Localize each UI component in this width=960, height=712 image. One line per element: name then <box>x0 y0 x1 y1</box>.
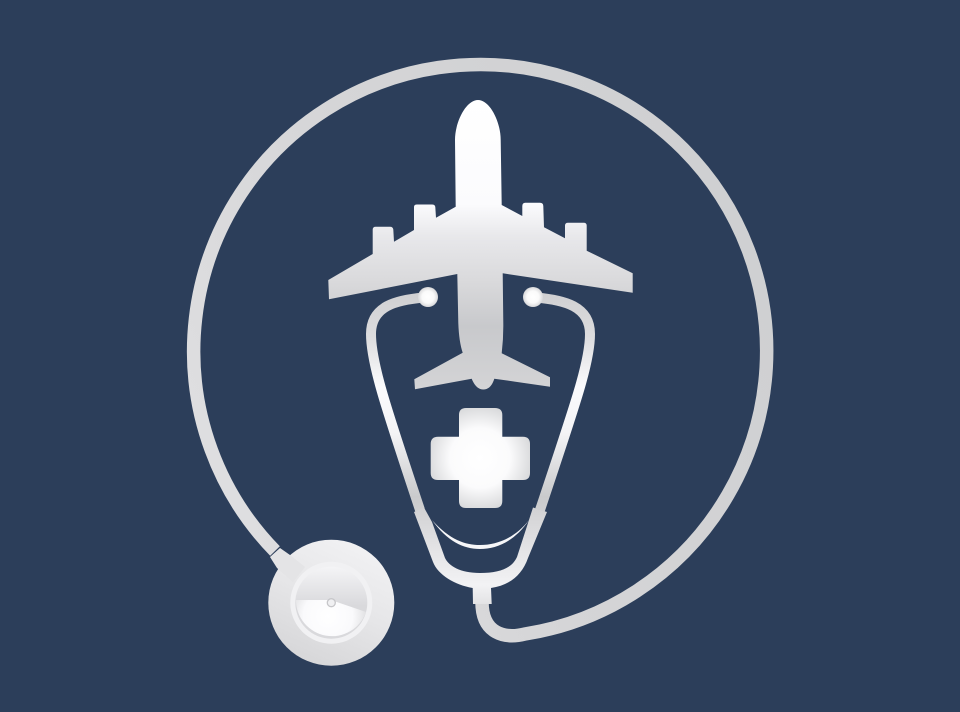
centre screw <box>327 599 335 607</box>
outer disc <box>268 540 394 666</box>
stethoscope headset <box>371 287 590 604</box>
chest piece <box>268 540 394 666</box>
airplane <box>328 100 633 390</box>
left ear tube <box>371 298 424 510</box>
bell rim <box>290 562 372 644</box>
yoke and stem <box>414 508 547 604</box>
diaphragm <box>295 567 367 639</box>
diaphragm highlight <box>296 600 366 636</box>
right ear tube <box>536 298 590 510</box>
right ear tip <box>523 287 543 307</box>
stethoscope tube ring <box>194 65 767 636</box>
spring <box>432 520 529 549</box>
tube connector <box>270 548 305 582</box>
left ear tip <box>418 287 438 307</box>
medical cross <box>431 408 530 508</box>
